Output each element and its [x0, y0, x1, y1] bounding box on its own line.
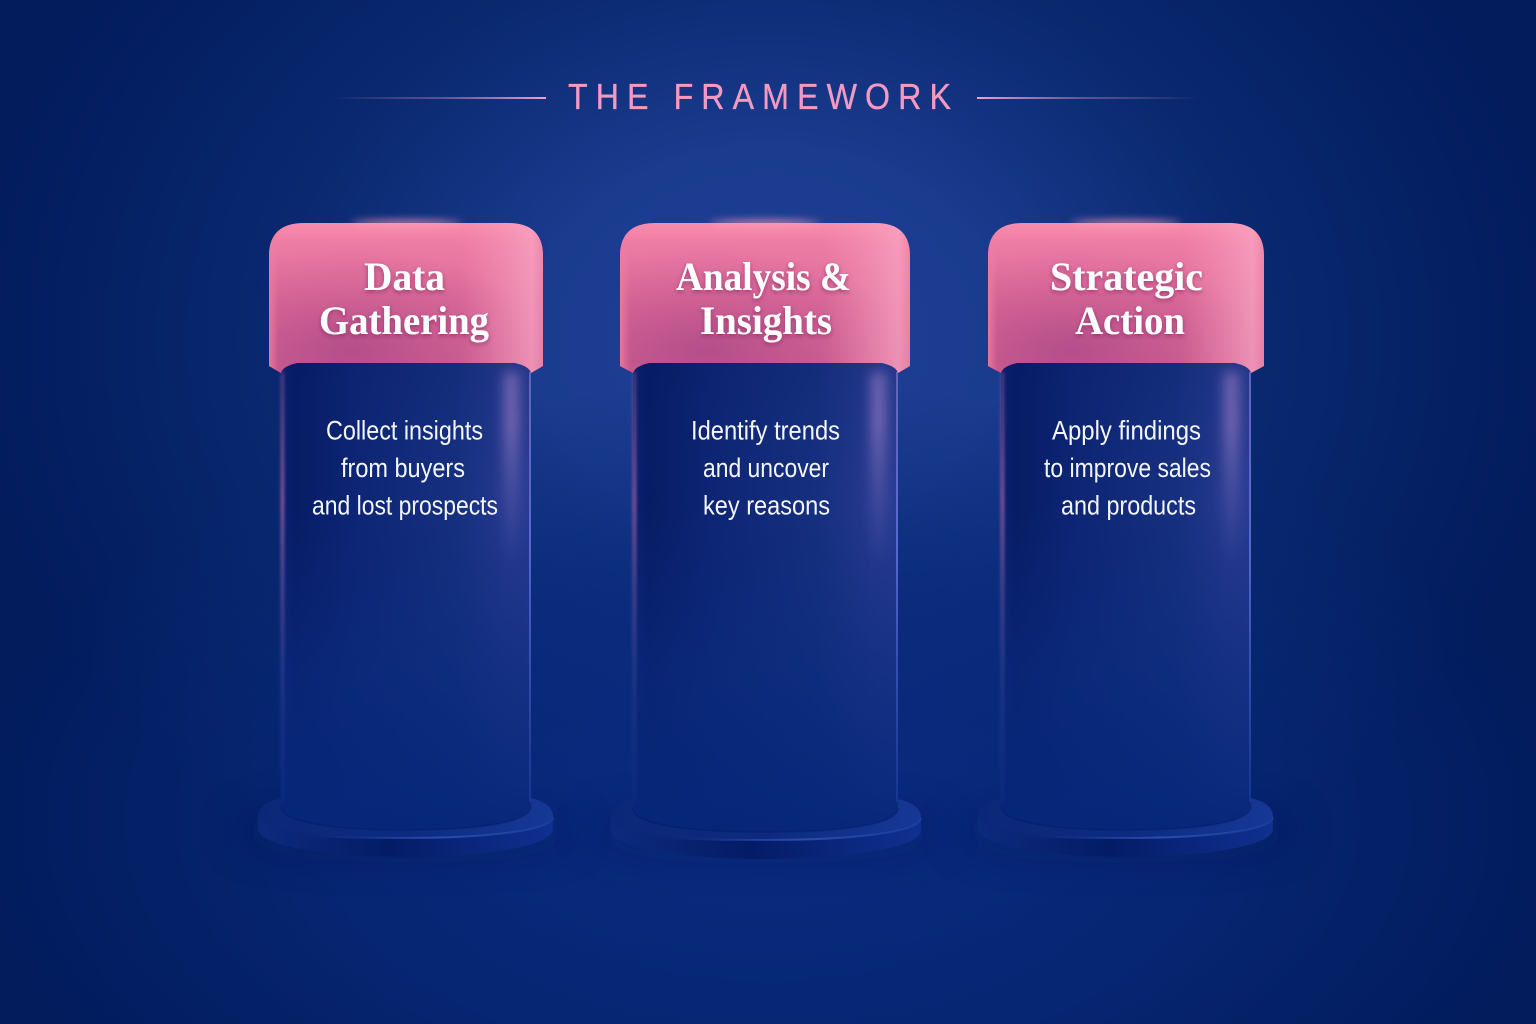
description: and uncover	[703, 453, 829, 483]
pink cap	[269, 220, 543, 373]
heading: Data	[364, 254, 445, 299]
heading: Action	[1075, 298, 1185, 343]
pedestal base	[236, 798, 576, 857]
description	[312, 416, 498, 520]
panel: Analysis & Insights pillar	[591, 220, 941, 859]
description: from buyers	[341, 453, 465, 483]
description: to improve sales	[1044, 453, 1211, 483]
pedestal base	[591, 799, 941, 859]
description: and products	[1061, 490, 1196, 520]
description	[1044, 416, 1211, 520]
description	[691, 416, 840, 520]
heading: Analysis &	[676, 254, 851, 299]
description: Apply findings	[1052, 416, 1201, 446]
title: The Framework: THE FRAMEWORK	[568, 76, 959, 117]
column body	[633, 363, 898, 832]
pedestal base	[956, 798, 1296, 857]
heading	[1050, 254, 1203, 343]
heading	[319, 254, 489, 343]
heading: Insights	[700, 298, 832, 343]
description: Identify trends	[691, 416, 840, 446]
pink cap	[988, 220, 1264, 373]
panel: Data Gathering pillar	[236, 220, 576, 857]
panel: Strategic Action pillar	[956, 220, 1296, 857]
column body	[281, 363, 531, 830]
heading: Strategic	[1050, 254, 1203, 299]
heading	[676, 254, 851, 343]
description: Collect insights	[326, 416, 483, 446]
pink cap	[620, 220, 910, 373]
column body	[1001, 363, 1251, 830]
heading: Gathering	[319, 298, 489, 343]
description: key reasons	[703, 490, 830, 520]
description: and lost prospects	[312, 490, 498, 520]
